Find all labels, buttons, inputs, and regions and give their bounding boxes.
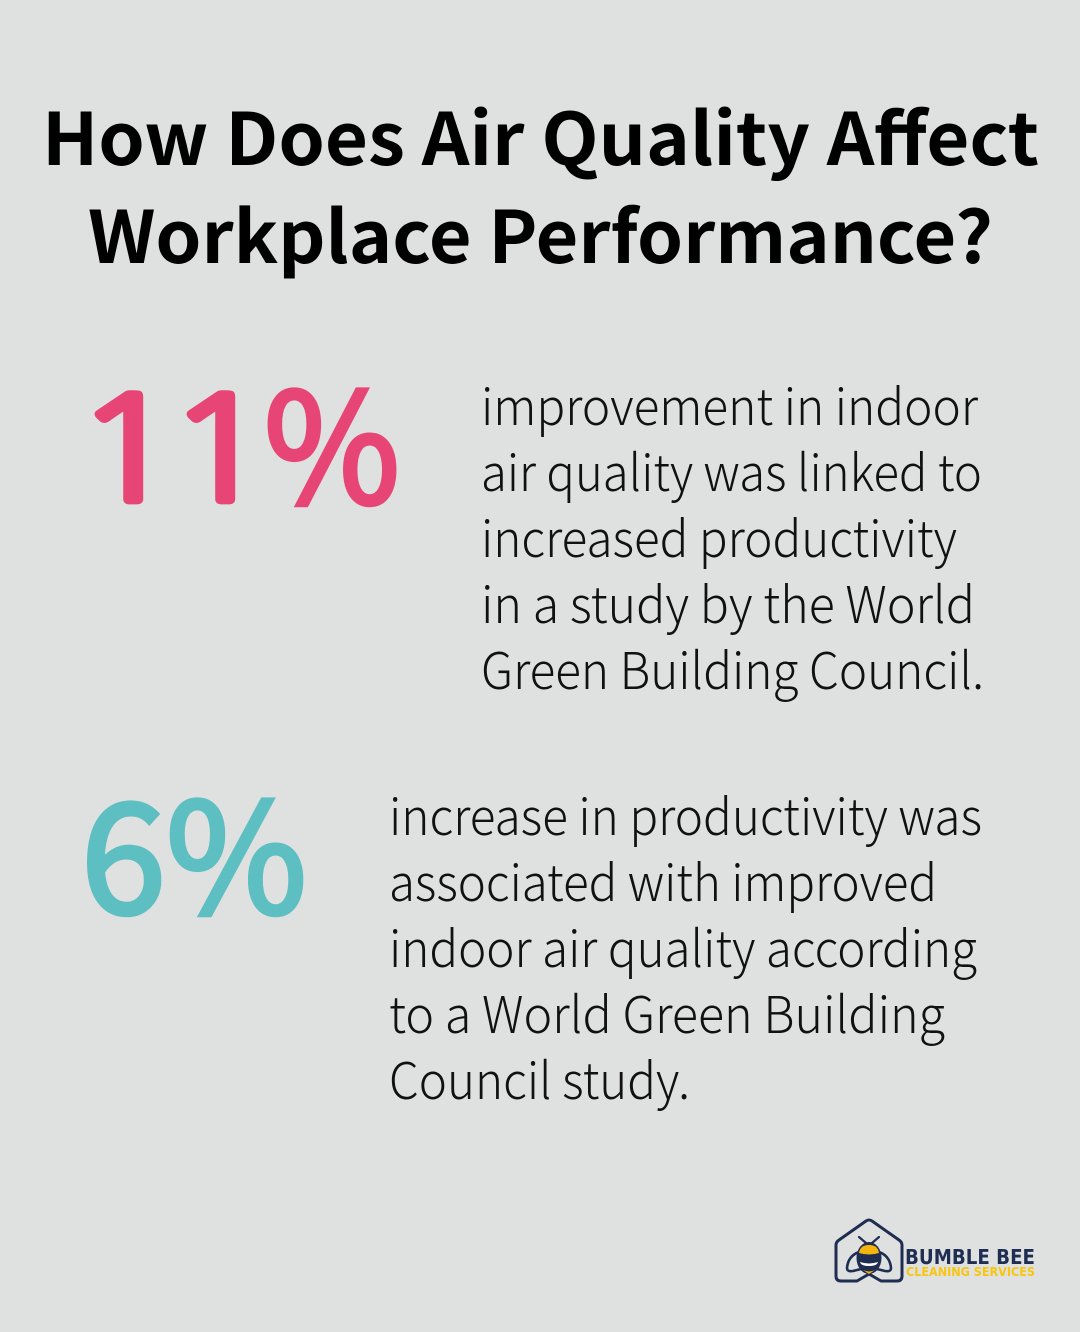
- icon: bee: [847, 1237, 891, 1274]
- text block: 11% description: improvement in indoor: [481, 366, 979, 440]
- text block: 11% description: [481, 366, 984, 704]
- text block: 6% description: [389, 776, 982, 1114]
- text block: 6% description: indoor air quality according: [389, 908, 977, 982]
- text block: 6% description: associated with improved: [389, 842, 937, 916]
- logo: Bumble Bee Cleaning Services: [836, 1220, 1035, 1281]
- statistic: 11%: 1: [73, 377, 182, 522]
- statistic: 11%: %: [264, 327, 400, 547]
- statistic: 11%: 1: [165, 377, 274, 522]
- text block: 6% description: Council study.: [389, 1040, 690, 1114]
- statistic: 11%: [73, 327, 400, 547]
- text block: 6% description: to a World Green Building: [389, 974, 945, 1048]
- title: Workplace Performance?: [88, 179, 993, 284]
- text block: 11% description: Green Building Council.: [481, 630, 984, 704]
- title: How Does Air Quality Affect: [42, 81, 1039, 186]
- text block: 11% description: in a study by the World: [481, 564, 975, 638]
- logo tagline: CLEANING SERVICES: [906, 1265, 1035, 1279]
- title: [42, 81, 1039, 284]
- logo wordmark: BUMBLE BEE: [905, 1245, 1035, 1269]
- text block: 11% description: increased productivity: [481, 498, 957, 572]
- text block: 6% description: increase in productivity was: [389, 776, 982, 850]
- statistic: 6%: 6%: [81, 737, 307, 957]
- icon: house outline: [836, 1220, 902, 1281]
- text block: 11% description: air quality was linked to: [481, 432, 982, 506]
